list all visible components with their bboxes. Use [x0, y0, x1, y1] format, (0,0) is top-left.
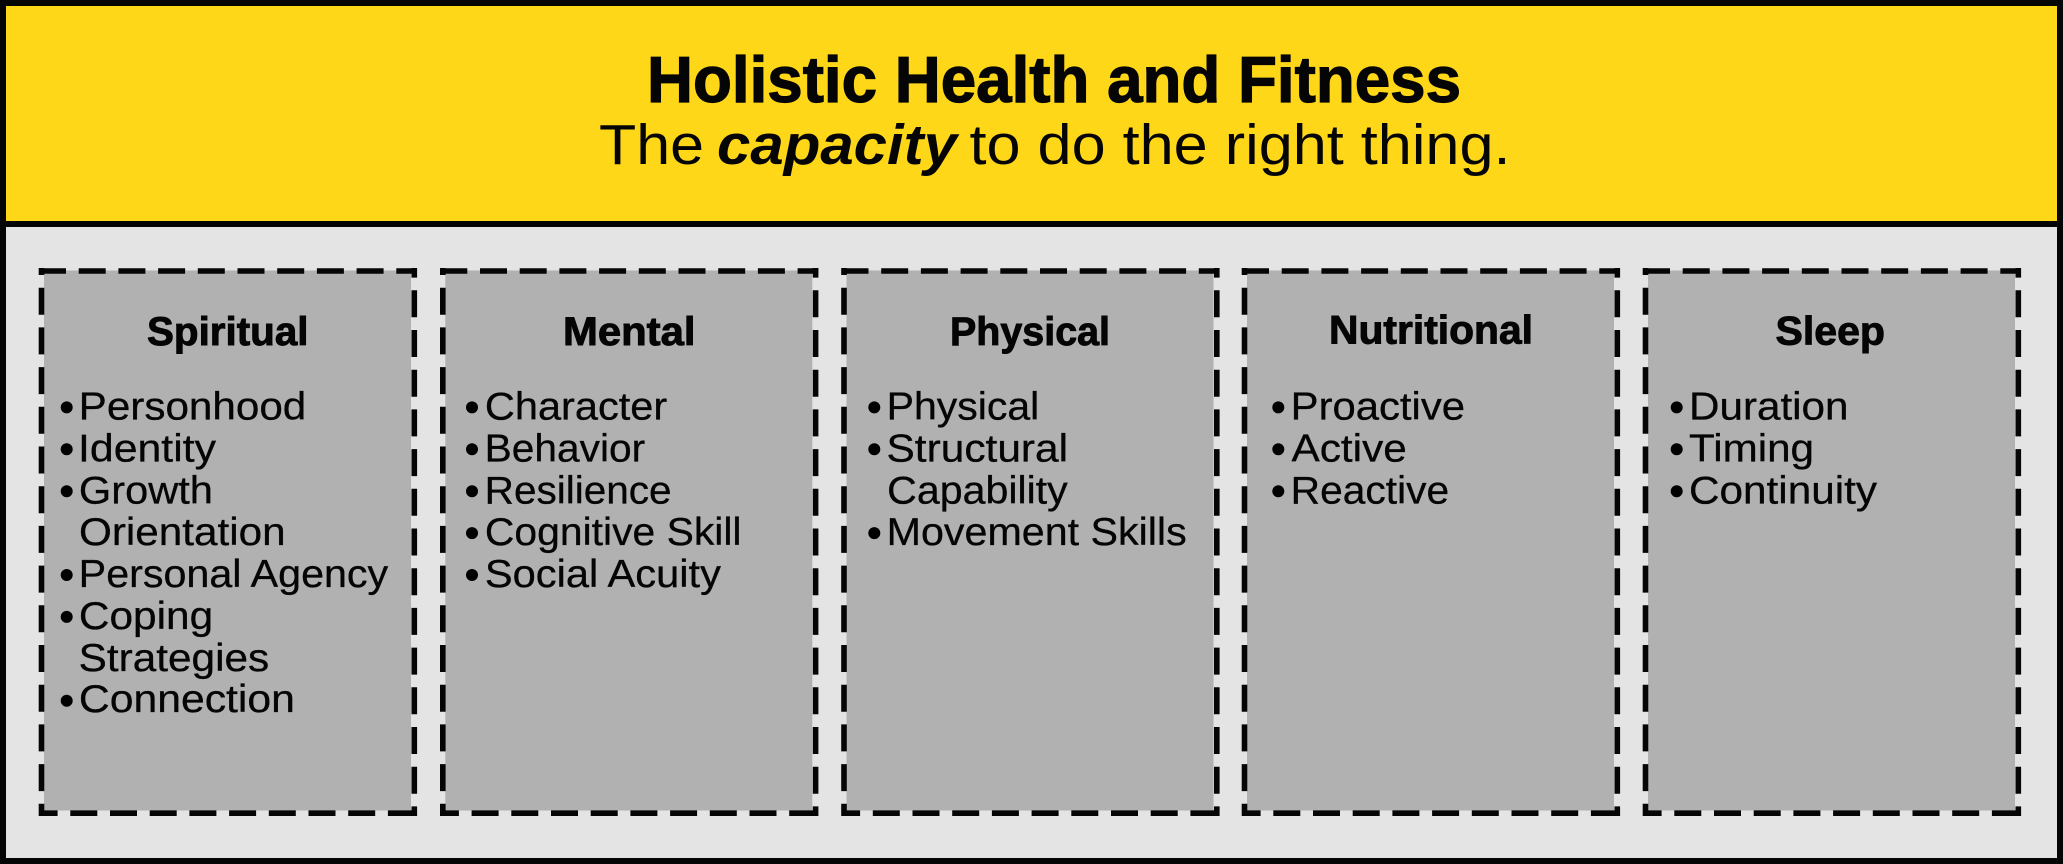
- panel box: Sleep: [1643, 268, 2021, 816]
- subtitle: The: [599, 113, 704, 177]
- list: Sleep: Duration: [1689, 386, 1848, 428]
- list: Spiritual: Personal Agency: [79, 553, 389, 596]
- list: Mental: Cognitive Skill: [485, 511, 742, 554]
- panel: Mental: [440, 268, 818, 816]
- subtitle: capacity: [717, 113, 960, 177]
- list: Spiritual: Identity: [78, 427, 217, 470]
- list: Spiritual: Connection: [79, 678, 295, 721]
- panel box: Physical: [842, 268, 1220, 816]
- list: Mental: Character: [485, 386, 667, 428]
- heading: Nutritional: Nutritional: [1329, 308, 1533, 352]
- heading: Spiritual: Spiritual: [147, 310, 308, 354]
- list: Mental: Behavior: [485, 427, 645, 470]
- list: Spiritual: Orientation: [79, 511, 286, 554]
- list: Physical: Physical: [887, 386, 1039, 428]
- heading: Sleep: Sleep: [1776, 309, 1885, 353]
- subtitle: to do the right thing.: [970, 113, 1510, 177]
- list: Spiritual: Personhood: [79, 386, 306, 428]
- list: Nutritional: Reactive: [1291, 469, 1449, 512]
- list: Physical: [868, 386, 1187, 554]
- list: Nutritional: Active: [1292, 427, 1407, 470]
- list: Physical: Movement Skills: [887, 511, 1187, 554]
- list: Physical: Structural: [886, 427, 1068, 470]
- list: Sleep: Timing: [1689, 427, 1814, 470]
- list: Nutritional: Proactive: [1291, 386, 1465, 428]
- panel: Physical: [842, 268, 1220, 816]
- list: Nutritional: [1272, 386, 1465, 512]
- list: Sleep: Continuity: [1689, 469, 1878, 512]
- list: Physical: Capability: [887, 469, 1068, 512]
- list: Spiritual: [61, 386, 389, 721]
- list: Spiritual: Coping: [79, 595, 213, 638]
- panel box: Spiritual: [39, 268, 417, 816]
- panel: Spiritual: [39, 268, 417, 816]
- list: Mental: [466, 386, 742, 596]
- panel box: Mental: [440, 268, 818, 816]
- subtitle: [599, 113, 1510, 177]
- list: Mental: Social Acuity: [485, 553, 722, 596]
- yellow title banner: [6, 6, 2057, 221]
- list: Spiritual: Growth: [79, 469, 213, 512]
- list: Spiritual: Strategies: [79, 637, 269, 680]
- panel box: Nutritional: [1242, 268, 1620, 816]
- title: Holistic Health and Fitness: [647, 43, 1461, 116]
- list: Sleep: [1671, 386, 1878, 512]
- heading: Physical: Physical: [950, 310, 1110, 354]
- heading: Mental: Mental: [563, 310, 696, 354]
- panel: Nutritional: [1242, 268, 1620, 816]
- list: Mental: Resilience: [485, 469, 672, 512]
- panel: Sleep: [1643, 268, 2021, 816]
